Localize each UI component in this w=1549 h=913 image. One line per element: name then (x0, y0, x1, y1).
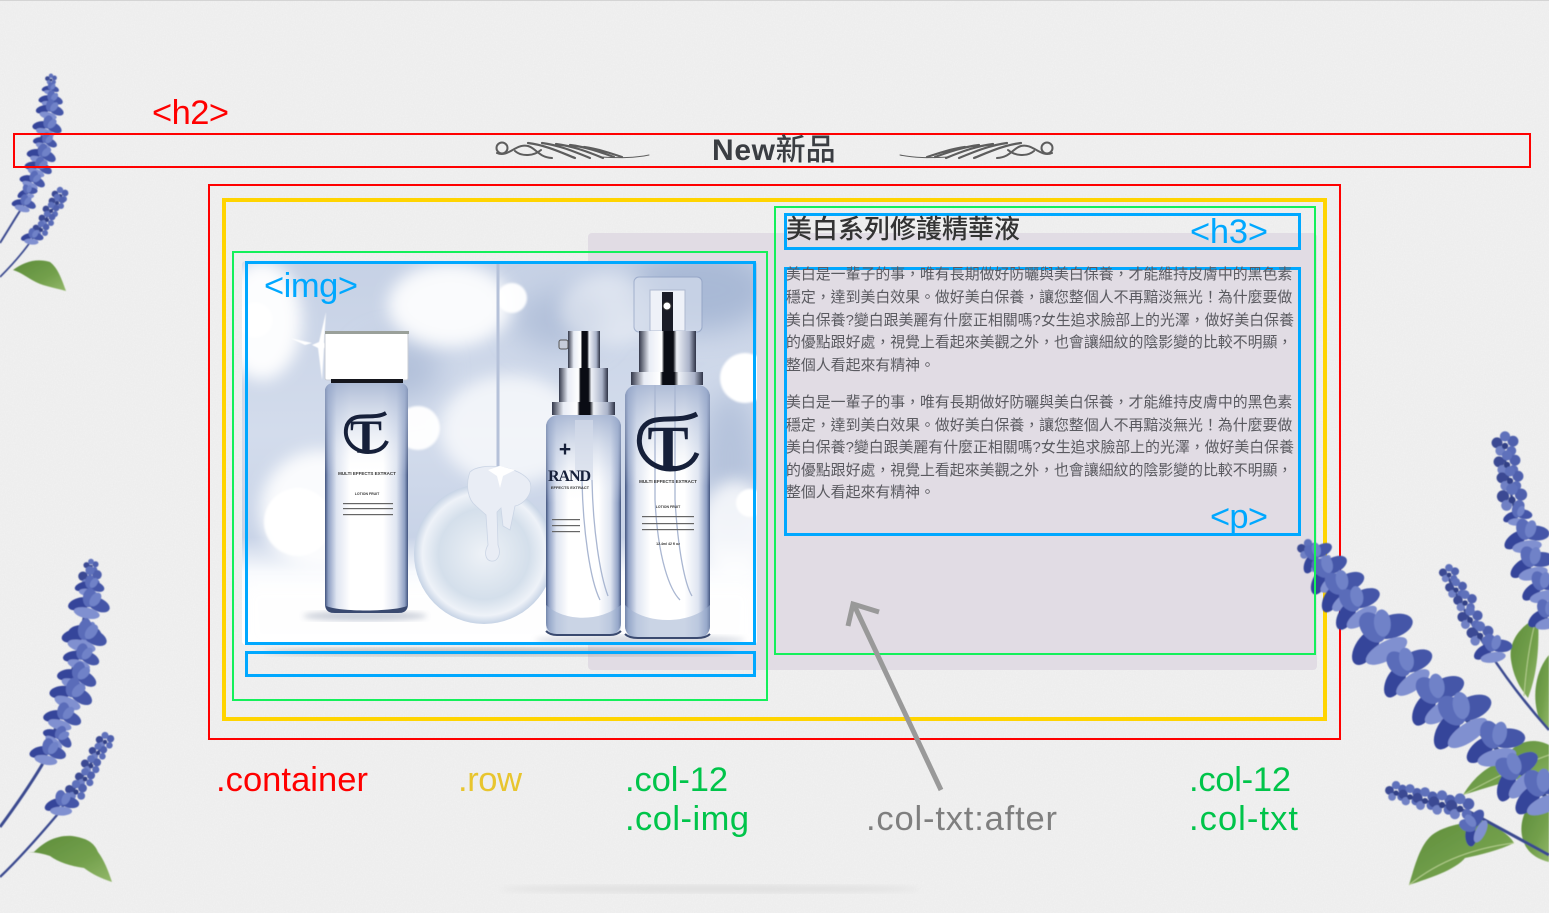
flourish: left (496, 142, 649, 158)
bottle three: serum with clear cap: MULTI EFFECTS EXTRACT (639, 479, 697, 484)
paragraph two: 美白保養?變白跟美麗有什麼正相關嗎?女生追求臉部上的光澤，做好美白保養 (786, 438, 1294, 456)
bottle three: serum with clear cap: 12.4ml 42 fl oz (656, 542, 680, 546)
label: img: <img> (264, 267, 358, 305)
paragraph one (786, 265, 1294, 374)
label: row: .row (458, 761, 522, 799)
paragraph one: 穩定，達到美白效果。做好美白保養，讓您整個人不再黯淡無光！為什麼要做 (786, 288, 1292, 306)
label: p: <p> (1210, 498, 1268, 536)
paragraph two: 整個人看起來有精神。 (786, 484, 935, 501)
label: col-txt after: .col-txt:after (866, 800, 1057, 838)
paragraph two: 穩定，達到美白效果。做好美白保養，讓您整個人不再黯淡無光！為什麼要做 (786, 416, 1292, 434)
stems right (1400, 655, 1549, 800)
bottle three: serum with clear cap: T (647, 415, 689, 483)
paragraph one: 的優點跟好處，視覺上看起來美觀之外，也會讓細紋的陰影變的比較不明顯， (786, 333, 1292, 351)
label: col-12 col-img: .col-img (625, 800, 749, 838)
green box: col-img (233, 252, 767, 700)
bottle three: serum with clear cap: LOTION FRUIT (656, 505, 681, 509)
lavender sprigs: right side (1291, 431, 1549, 885)
blue box: p (786, 268, 1300, 534)
pearl with cream drip (414, 261, 554, 624)
big spike (1297, 539, 1319, 559)
product image: three bottles and pearl (242, 261, 757, 645)
h3 heading: 美白系列修護精華液 (786, 214, 1020, 244)
yellow box: row (224, 200, 1325, 719)
middle spike (1439, 564, 1459, 582)
label: col-12 col-img (625, 761, 749, 838)
heading h2 with flourishes (496, 134, 1052, 167)
heading text: New新品 (712, 134, 836, 167)
bottle one: tall toner: LOTION FRUIT (355, 492, 380, 496)
paragraph two: 美白是一輩子的事，唯有長期做好防曬與美白保養，才能維持皮膚中的黑色素 (786, 393, 1292, 411)
bottle one: tall toner (325, 331, 409, 613)
flourish: right (900, 142, 1052, 158)
label: col-12 col-img: .col-12 (625, 761, 728, 799)
paragraph two: 的優點跟好處，視覺上看起來美觀之外，也會讓細紋的陰影變的比較不明顯， (786, 461, 1292, 479)
label: h2: <h2> (152, 94, 229, 132)
paragraph one: 美白是一輩子的事，唯有長期做好防曬與美白保養，才能維持皮膚中的黑色素 (786, 265, 1292, 283)
lavender sprig: top left (0, 74, 68, 291)
bottle one: tall toner: MULTI EFFECTS EXTRACT (338, 471, 396, 476)
blue box: h3 (786, 214, 1300, 248)
blue box: under image gap (246, 652, 754, 676)
bottle three: serum with clear cap (625, 277, 710, 638)
red box: h2 (14, 134, 1530, 167)
product image shadow (264, 648, 736, 656)
arrow: to col-txt after (848, 604, 941, 790)
label: container: .container (216, 761, 368, 799)
leaves right (1409, 617, 1549, 885)
label: col-12 col-txt: .col-txt (1189, 800, 1298, 838)
paragraph one: 美白保養?變白跟美麗有什麼正相關嗎?女生追求臉部上的光澤，做好美白保養 (786, 311, 1294, 329)
bottle two: pump bottle (546, 331, 621, 635)
red box: container (209, 185, 1340, 739)
bottle two: pump bottle: + (559, 438, 571, 461)
upper spike (1492, 431, 1518, 456)
lavender sprig: bottom left (0, 559, 114, 882)
leaf veins right (1409, 620, 1549, 885)
low spike (1385, 781, 1407, 801)
bottle one: tall toner: T (350, 411, 382, 464)
star sparkle (294, 314, 326, 378)
bottle two: pump bottle: EFFECTS EXTRACT (551, 485, 590, 490)
paragraph two (786, 393, 1294, 501)
blue box: img (246, 262, 754, 644)
label: h3: <h3> (1190, 213, 1268, 251)
panel: col-txt after purple background (588, 233, 1317, 670)
bottle two: pump bottle: RAND (548, 468, 591, 485)
green box: col-txt (775, 207, 1315, 654)
label: col-12 col-txt: .col-12 (1189, 761, 1291, 799)
label: col-12 col-txt (1189, 761, 1298, 838)
paragraph one: 整個人看起來有精神。 (786, 357, 935, 374)
